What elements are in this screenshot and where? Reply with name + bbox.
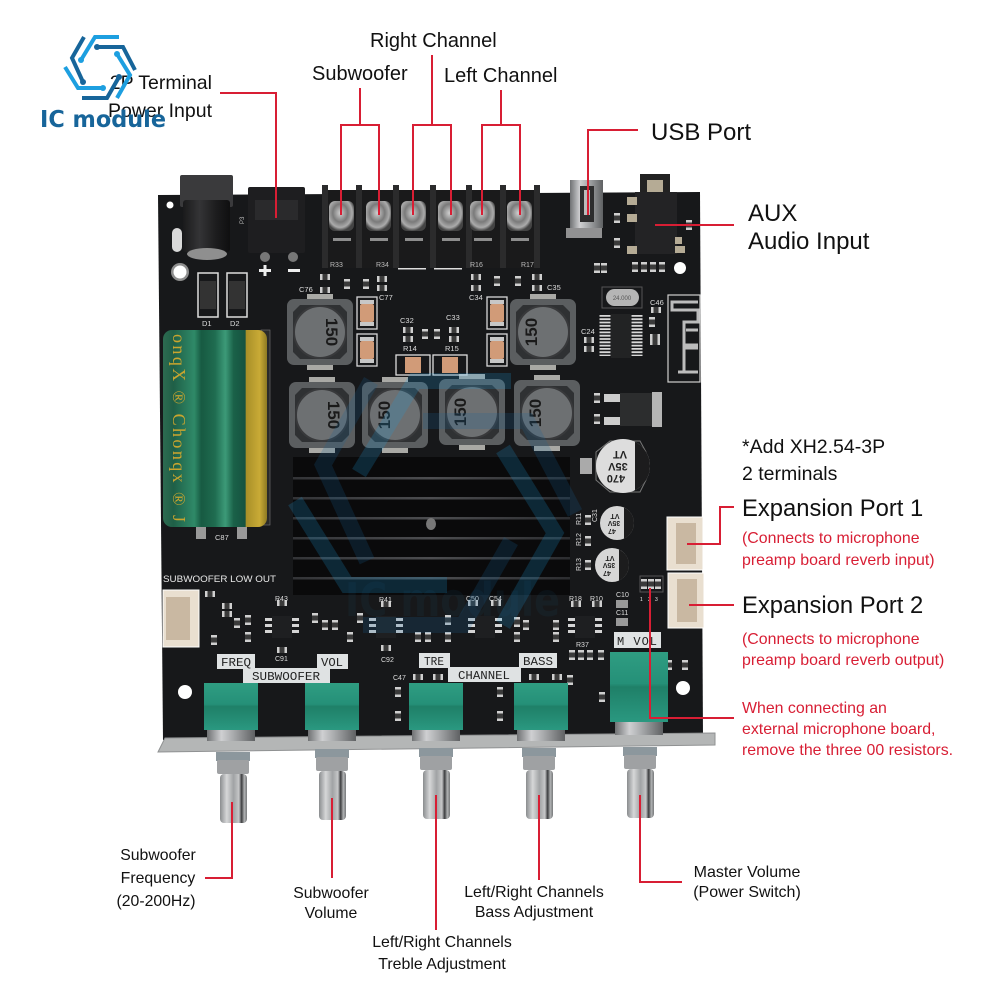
- large 470uF capacitor: 470: [607, 472, 625, 484]
- voltage regulator: [594, 392, 662, 427]
- note: remove resistors: remove the three 00 resistors.: [742, 742, 953, 759]
- speaker terminal block: [322, 185, 540, 270]
- watermark text: IC module: [345, 573, 560, 627]
- small capacitors and resistors: R14: [403, 344, 417, 353]
- inductors: 150: [522, 318, 541, 346]
- label: treble adjustment: Treble Adjustment: [378, 956, 506, 973]
- leader: expansion port 2: [689, 604, 734, 606]
- leader: master volume: [640, 795, 682, 882]
- crystal oscillator: [602, 287, 642, 308]
- small 47uF capacitors: C31: [592, 509, 599, 522]
- AUX audio jack: [594, 174, 692, 273]
- label: expansion port 2: preamp board reverb output): [742, 652, 944, 669]
- control labels: [217, 632, 661, 684]
- small 47uF capacitors: R13: [576, 558, 583, 571]
- label: power input: 2P Terminal: [110, 72, 212, 94]
- label: expansion port 2: Expansion Port 2: [742, 592, 923, 619]
- leader: bass: [538, 795, 540, 880]
- inductors: [287, 294, 580, 453]
- leader: AUX: [655, 224, 734, 226]
- label: subwoofer frequency: (20-200Hz): [116, 893, 196, 910]
- large 470uF capacitor: [580, 439, 650, 493]
- control labels: VOL: [321, 656, 343, 670]
- label: expansion port 2: [742, 592, 944, 669]
- crystal oscillator: 24.000: [613, 296, 632, 302]
- label: USB port: USB Port: [651, 119, 751, 146]
- label: expansion port 1: preamp board reverb input): [742, 552, 935, 569]
- logo dots: [78, 44, 122, 91]
- control labels: M VOL: [617, 635, 657, 649]
- leader: subwoofer frequency: [205, 802, 232, 878]
- diodes: D1: [202, 319, 212, 328]
- label: expansion port 2: (Connects to microphone: [742, 631, 920, 648]
- label: subwoofer volume: Volume: [305, 905, 358, 922]
- control labels: BASS: [523, 655, 553, 669]
- label: subwoofer volume: Subwoofer: [293, 885, 369, 902]
- label: left channel: Left Channel: [444, 65, 557, 87]
- small 47uF capacitors: 35V: [602, 561, 615, 568]
- label: bass adjustment: Bass Adjustment: [475, 904, 594, 921]
- control labels: CHANNEL: [458, 669, 510, 683]
- label: bass adjustment: [464, 884, 604, 921]
- small capacitors and resistors: C34: [469, 293, 483, 302]
- subwoofer low out connector: [163, 574, 276, 647]
- label: expansion port 1: [742, 495, 935, 569]
- expansion connectors: [640, 517, 704, 628]
- small capacitors and resistors: C77: [379, 293, 393, 302]
- control labels: SUBWOOFER: [252, 670, 320, 684]
- speaker terminal block: R16: [470, 262, 483, 269]
- small capacitors and resistors: C76: [299, 285, 313, 294]
- note: remove resistors: When connecting an: [742, 700, 887, 717]
- lower board components: R18: [569, 596, 582, 603]
- small capacitors and resistors: C32: [400, 316, 414, 325]
- small 47uF capacitors: VT: [610, 512, 619, 519]
- lower board components: C10: [616, 592, 629, 599]
- leader: left channel: [482, 90, 520, 215]
- label: subwoofer frequency: Frequency: [121, 870, 195, 887]
- DC power jack: [180, 175, 233, 260]
- label: right channel: Right Channel: [370, 30, 497, 52]
- note: remove resistors: external microphone board,: [742, 721, 935, 738]
- lower board components: C92: [381, 657, 394, 664]
- small capacitors and resistors: C35: [547, 283, 561, 292]
- mounting holes: [166, 202, 690, 699]
- lower board components: C54: [489, 596, 502, 603]
- label: subwoofer frequency: Subwoofer: [120, 847, 196, 864]
- small capacitors and resistors: [299, 274, 595, 375]
- inductors: 150: [451, 398, 470, 426]
- bluetooth antenna: [668, 295, 700, 382]
- 2-pin power terminal: [240, 187, 305, 262]
- label: expansion port 1: Expansion Port 1: [742, 495, 923, 522]
- leader: USB: [588, 130, 638, 215]
- expansion connectors: 3: [655, 597, 658, 603]
- small 47uF capacitors: [576, 506, 634, 582]
- leader: right channel: [413, 55, 451, 215]
- note: remove resistors: [742, 700, 953, 759]
- label: treble adjustment: Left/Right Channels: [372, 934, 512, 951]
- lower board components: C91: [275, 656, 288, 663]
- green electrolytic capacitor: [163, 330, 270, 542]
- board base: [158, 192, 703, 740]
- small 47uF capacitors: VT: [605, 554, 614, 561]
- control labels: FREQ: [221, 656, 251, 670]
- small 47uF capacitors: 47: [608, 527, 616, 534]
- small capacitors and resistors: R15: [445, 344, 459, 353]
- lower board components: R43: [275, 596, 288, 603]
- label: master volume: [693, 864, 801, 901]
- small 47uF capacitors: R12: [576, 533, 583, 546]
- label: AUX audio input: [748, 200, 870, 255]
- label: power input: Power Input: [108, 100, 213, 122]
- speaker terminal block: R34: [376, 262, 389, 269]
- label: subwoofer volume: [293, 885, 369, 922]
- metal bracket: [158, 733, 715, 752]
- diodes: [198, 273, 247, 328]
- leader: power input: [220, 93, 276, 218]
- potentiometers: [204, 652, 668, 741]
- circuit board: [158, 174, 715, 823]
- polarity marks: [259, 265, 300, 276]
- inductors: 150: [375, 401, 394, 429]
- audio chip: [584, 298, 664, 358]
- 2-pin power terminal: P3: [240, 216, 246, 224]
- lower board components: R10: [590, 596, 603, 603]
- expansion connectors: 2: [648, 597, 651, 603]
- watermark logo over board: [295, 381, 575, 625]
- small 47uF capacitors: 47: [603, 569, 611, 576]
- leader: expansion port 1: [687, 507, 734, 544]
- label: master volume: Master Volume: [694, 864, 800, 881]
- logo: IC module: [40, 37, 166, 133]
- subwoofer low out connector: SUBWOOFER LOW OUT: [163, 574, 276, 585]
- inductors: 150: [324, 401, 343, 429]
- inductors: 150: [322, 318, 341, 346]
- label: subwoofer frequency: [116, 847, 196, 910]
- green electrolytic capacitor: C87: [215, 533, 229, 542]
- label: expansion port 1: (Connects to microphone: [742, 530, 920, 547]
- lower board components: C50: [466, 596, 479, 603]
- small 47uF capacitors: R11: [576, 513, 583, 525]
- leader: treble: [435, 795, 437, 930]
- expansion connectors: 1: [640, 597, 643, 603]
- label: subwoofer: Subwoofer: [312, 63, 408, 85]
- note: add terminals: 2 terminals: [742, 463, 838, 485]
- small capacitors and resistors: C24: [581, 327, 595, 336]
- label: treble adjustment: [372, 934, 512, 973]
- label: master volume: (Power Switch): [693, 884, 801, 901]
- leader: subwoofer: [341, 88, 379, 215]
- label: AUX audio input: Audio Input: [748, 228, 870, 255]
- small capacitors and resistors: C33: [446, 313, 460, 322]
- audio chip: C46: [650, 298, 664, 307]
- leader: resistors: [650, 588, 734, 718]
- large 470uF capacitor: 35V: [608, 460, 628, 472]
- note: add terminals: [742, 436, 885, 485]
- green electrolytic capacitor: onqX ® Chonqx ® J: [169, 334, 189, 522]
- label: bass adjustment: Left/Right Channels: [464, 884, 604, 901]
- control labels: TRE: [424, 655, 444, 669]
- USB port: [566, 180, 603, 238]
- red leader lines: [205, 55, 734, 930]
- label: AUX audio input: AUX: [748, 200, 797, 227]
- inductors: 150: [526, 399, 545, 427]
- large 470uF capacitor: VT: [613, 448, 627, 460]
- label: power input: [108, 72, 213, 122]
- small 47uF capacitors: 35V: [607, 519, 620, 526]
- lower board components: C11: [616, 610, 628, 617]
- note: add terminals: *Add XH2.54-3P: [742, 436, 885, 458]
- speaker terminal block: R17: [521, 262, 534, 269]
- lower board components: [205, 591, 688, 721]
- diodes: D2: [230, 319, 240, 328]
- heatsink: [293, 457, 570, 595]
- leader: subwoofer volume: [331, 798, 333, 878]
- knob shafts: [216, 747, 657, 823]
- lower board components: C47: [393, 675, 406, 682]
- lower board components: R37: [576, 642, 589, 649]
- logo hexagon mark: [65, 37, 135, 98]
- speaker terminal block: R33: [330, 262, 343, 269]
- logo wordmark: IC module: [40, 107, 166, 133]
- lower board components: R41: [379, 597, 392, 604]
